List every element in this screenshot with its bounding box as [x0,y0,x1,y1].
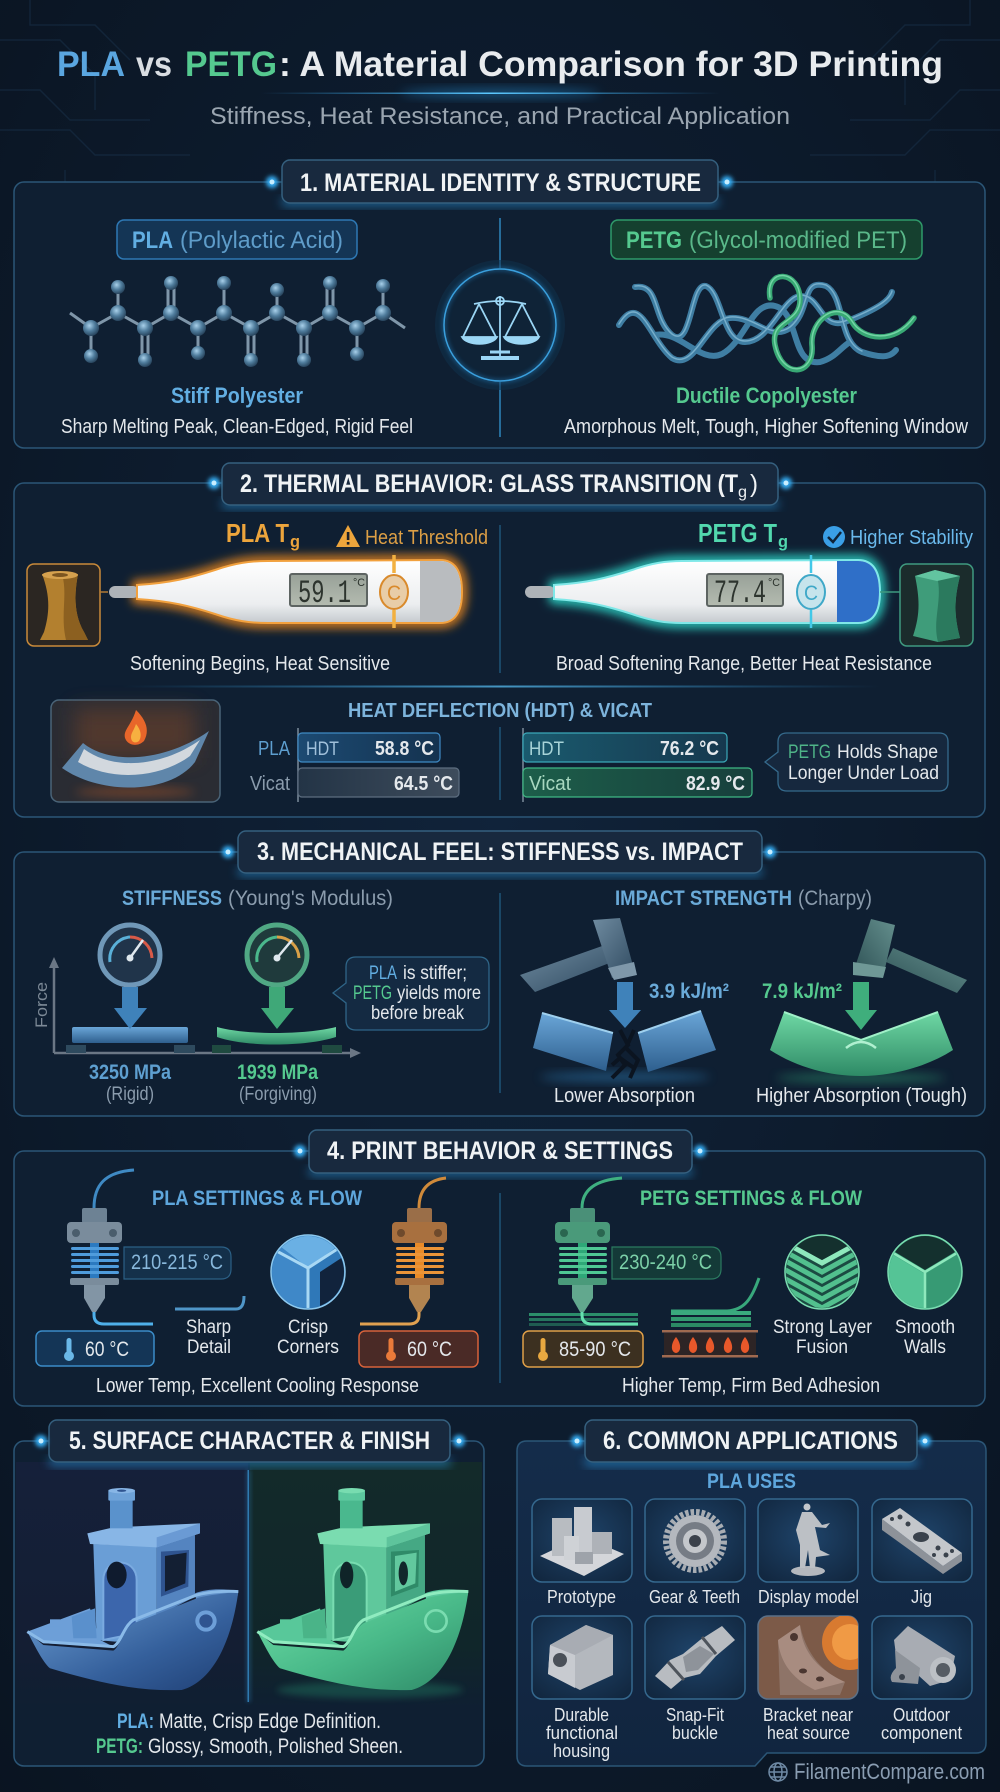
panel: 6 common applications [517,1420,986,1766]
bar chart: PLA HDT and Vicat [250,728,459,802]
values: modulus: 1939 MPa [237,1061,318,1084]
bar chart: PETG HDT and Vicat: 82.9 °C [686,773,745,795]
tile: durable functional housing: functional [546,1723,618,1743]
thermometer: PETG 77.4 C: C [804,582,818,605]
label: PETG Tg: g [778,532,788,551]
thermometer: PLA 59.1 C: °C [353,577,365,589]
feature: sharp detail: Sharp [186,1317,231,1338]
label: PLA Tg: g [290,532,300,551]
text: surface captions: PETG: [96,1735,143,1758]
text: softening captions: Softening Begins, Heat Sensitive [130,653,390,675]
callout: PLA is stiffer: PETG [353,983,392,1004]
gauge: PLA rigid plate [66,925,195,1053]
tile: snap-fit buckle [645,1616,745,1743]
tile: gear and teeth: Gear & Teeth [649,1587,740,1607]
circuit pattern [0,0,1000,205]
panel: 5 surface character [14,1420,484,1766]
callout: PLA is stiffer: yields more [397,983,481,1004]
heading: section 2: g [738,484,747,501]
callout: PETG holds shape [765,733,948,791]
label: PLA pill: PLA [132,227,173,254]
text: PLA summary: Lower Temp, Excellent Cooling Response [96,1375,419,1397]
feature: strong layer fusion [773,1230,873,1358]
badge: PETG nozzle temperature: 230-240 °C [619,1251,712,1274]
icon: warning heat threshold: Heat Threshold [365,527,488,549]
label: PETG Tg: PETG T [698,518,777,548]
icon: PLA softening block [27,564,108,646]
label: PLA Tg: PLA T [226,518,289,548]
icon: PETG block [880,564,973,646]
heading: impact strength: IMPACT STRENGTH [615,887,792,910]
bar chart: PETG HDT and Vicat: 76.2 °C [660,738,719,760]
callout: PLA is stiffer: before break [371,1003,464,1024]
feature: smooth walls [885,1235,965,1358]
tile: outdoor component: component [881,1723,962,1743]
illustration: PLA hammer fracture: 3.9 kJ/m² [649,980,729,1003]
panel: 3 mechanical feel [14,831,985,1116]
label: PETG pill [611,220,922,259]
illustration: PLA blue boat [27,1488,238,1690]
heading: stiffness: (Young's Modulus) [228,887,393,910]
values: modulus: (Rigid) [106,1084,154,1105]
tile: bracket near heat source: heat source [767,1723,850,1743]
tile: snap-fit buckle: Snap-Fit [666,1705,724,1725]
subtitle: Stiffness, Heat Resistance, and Practical Application [210,103,790,130]
text: softening captions: Broad Softening Range, Better Heat Resistance [556,653,932,675]
bar chart: PETG HDT and Vicat: Vicat [529,773,571,795]
nozzle: PLA cool blue [67,1170,153,1324]
panel: 2 thermal behavior [14,463,985,817]
tile: outdoor component [872,1616,972,1743]
callout: PETG holds shape: Holds Shape [837,742,938,763]
tile: gear and teeth [645,1499,745,1607]
tile: durable functional housing: Durable [554,1705,609,1725]
nozzle: PETG green [529,1178,638,1326]
thermometer: PLA 59.1 C: 59.1 [298,575,351,612]
title: PETG [185,45,277,84]
thermometer: PETG 77.4 C: °C [768,577,780,589]
tile: prototype [532,1499,632,1607]
tile: display model [758,1499,859,1607]
tile: prototype: Prototype [547,1587,616,1607]
molecule: PETG tangled chains [619,275,914,370]
label: PLA pill: (Polylactic Acid) [180,227,343,254]
tile: display model: Display model [758,1587,859,1607]
bar chart: PLA HDT and Vicat: 58.8 °C [375,738,434,760]
tile: snap-fit buckle: buckle [672,1723,718,1743]
feature: strong layer fusion: Strong Layer [773,1317,873,1338]
molecule: PLA rigid chain [70,276,405,367]
badge: PETG nozzle temperature [612,1247,721,1279]
thermometer: PETG 77.4 C: 77.4 [714,575,766,612]
icon: flame on bending plate [51,700,220,802]
feature: heated bed adhesion [662,1278,759,1358]
text: softening captions [130,653,932,675]
chart axes: force [32,957,361,1058]
text: PLA identity: Sharp Melting Peak, Clean-Edged, Rigid Feel [61,416,413,438]
heading: stiffness: STIFFNESS [122,887,222,910]
icon: check higher stability: Higher Stability [850,527,973,549]
title glow line [261,88,720,98]
label: PETG pill: (Glycol-modified PET) [689,227,907,254]
text: PETG identity [564,383,968,438]
panel: 4 print behavior [14,1130,985,1406]
text: surface captions: PLA: [117,1710,154,1733]
label: PLA pill [117,220,357,259]
heading: PLA settings: PLA SETTINGS & FLOW [152,1187,362,1210]
callout: PLA is stiffer: is stiffer; [403,963,467,984]
illustration: PETG green boat [257,1488,468,1698]
label: PETG pill: PETG [626,227,682,254]
gauge: PETG bending plate [212,925,342,1053]
heading: impact strength: (Charpy) [798,887,872,910]
text: PETG identity: Ductile Copolyester [676,383,857,408]
feature: strong layer fusion: Fusion [796,1337,848,1358]
bar chart: PLA HDT and Vicat: HDT [306,739,339,760]
illustration: PETG hammer bend: Higher Absorption (Tough) [756,1085,967,1107]
heading: section 5 [35,1420,465,1466]
heading: PETG settings: PETG SETTINGS & FLOW [640,1187,862,1210]
tile: jig [872,1499,972,1607]
thermometer: PLA 59.1 C: C [387,582,401,605]
heading: stiffness [122,887,393,910]
tile: outdoor component: Outdoor [893,1705,950,1725]
illustration: PETG hammer bend [756,919,967,1107]
illustration: PETG hammer bend: 7.9 kJ/m² [762,980,842,1003]
heading: section 3 [222,831,776,876]
feature: sharp detail [175,1296,244,1358]
bar chart: PLA HDT and Vicat: PLA [258,738,291,760]
callout: PLA is stiffer: PLA [369,963,397,984]
badge: PLA nozzle temperature: 210-215 °C [131,1251,223,1274]
values: modulus: 3250 MPa [89,1061,171,1084]
thermometer: PETG 77.4 C [525,555,880,628]
icon: warning heat threshold [336,525,488,549]
badge: PLA bed cool [36,1331,154,1366]
tile: jig: Jig [911,1587,932,1607]
nozzle: PLA hot orange [360,1178,447,1324]
panel: 1 material identity [14,160,985,448]
title: vs [136,45,172,84]
bar chart: PETG HDT and Vicat: HDT [529,739,564,760]
text: surface captions: Glossy, Smooth, Polished Sheen. [148,1735,403,1758]
heading: section 4 [294,1130,706,1176]
text: PLA identity [61,383,413,438]
heading: section 2 [208,463,792,508]
tile: bracket near heat source [757,1615,859,1739]
badge: PETG bed [523,1331,643,1367]
title: PLA [57,45,125,84]
heading: section 6: 6. COMMON APPLICATIONS [603,1427,898,1455]
heading: section 4: 4. PRINT BEHAVIOR & SETTINGS [327,1137,673,1165]
thermometer: PLA 59.1 C [109,555,462,628]
heading: section 5: 5. SURFACE CHARACTER & FINISH [69,1427,430,1455]
badge: PETG bed: 85-90 °C [559,1338,631,1361]
text: surface captions [96,1710,403,1758]
tile: bracket near heat source: Bracket near [763,1705,853,1725]
heading: section 1: 1. MATERIAL IDENTITY & STRUCTURE [300,169,701,197]
feature: sharp detail: Detail [187,1337,231,1358]
heading: section 2: ) [750,470,758,498]
feature: smooth walls: Walls [904,1337,946,1358]
icon: balance scale [462,296,539,360]
badge: PLA bed warm [359,1331,478,1367]
values: modulus [89,1061,318,1105]
callout: PETG holds shape: Longer Under Load [788,763,939,784]
bar chart: PLA HDT and Vicat: 64.5 °C [394,773,453,795]
chart axes: force: Force [32,982,51,1028]
callout: PETG holds shape: PETG [788,742,831,763]
heading: HDT and Vicat: HEAT DEFLECTION (HDT) & VICAT [348,700,652,722]
feature: smooth walls: Smooth [895,1317,955,1338]
heading: section 6 [571,1420,931,1466]
illustration: PLA hammer fracture [520,918,729,1107]
text: PETG identity: Amorphous Melt, Tough, Higher Softening Window [564,416,968,438]
badge: PLA bed warm: 60 °C [407,1338,452,1361]
bar chart: PETG HDT and Vicat [523,728,752,802]
heading: section 3: 3. MECHANICAL FEEL: STIFFNESS vs. IMPACT [257,838,743,866]
tile: durable functional housing: housing [553,1741,610,1761]
callout: PLA is stiffer [333,957,489,1030]
badge: PLA nozzle temperature [124,1247,231,1279]
tile: durable functional housing [532,1616,632,1761]
feature: crisp corners: Crisp [288,1317,328,1338]
divider and scale emblem [435,218,565,437]
text: PLA identity: Stiff Polyester [171,383,303,408]
heading: section 1 [266,160,733,206]
title: : A Material Comparison for 3D Printing [279,45,943,84]
values: modulus: (Forgiving) [239,1084,317,1105]
feature: crisp corners [271,1230,346,1358]
feature: crisp corners: Corners [277,1337,339,1358]
text: PETG summary: Higher Temp, Firm Bed Adhesion [622,1375,880,1397]
illustration: PLA hammer fracture: Lower Absorption [554,1085,695,1107]
heading: section 2: 2. THERMAL BEHAVIOR: GLASS TRANSITION (T [240,470,738,498]
heading: PLA uses: PLA USES [707,1470,796,1493]
text: surface captions: Matte, Crisp Edge Definition. [159,1710,381,1733]
bar chart: PLA HDT and Vicat: Vicat [250,773,290,795]
badge: PLA bed cool: 60 °C [85,1338,129,1361]
